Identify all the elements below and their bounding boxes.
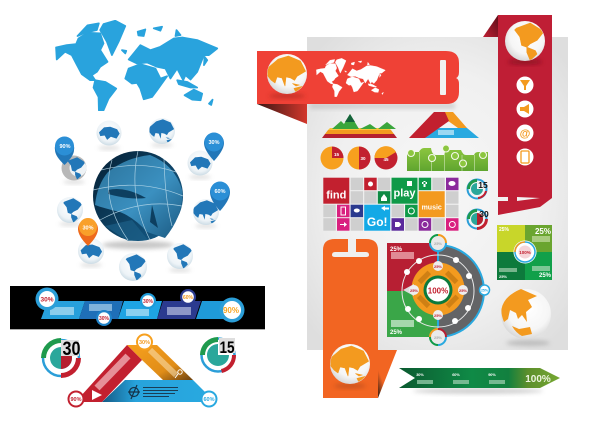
- small globe 6: [119, 253, 147, 281]
- red banner: [257, 51, 459, 124]
- badge 60%: 60%: [203, 397, 215, 403]
- inner labels: 25%: [434, 313, 442, 318]
- small globe 9: [62, 156, 86, 184]
- icon: megaphone: [516, 100, 534, 118]
- green arrow: 30%: [416, 373, 424, 377]
- world map: [56, 21, 217, 110]
- earth globe: [501, 289, 551, 346]
- green arrow: 60%: [452, 373, 460, 377]
- center 100%: 100%: [428, 286, 448, 296]
- pin 60%: 60%: [214, 189, 226, 195]
- red side: [80, 345, 142, 402]
- banner globe: [267, 54, 307, 98]
- panel: grey backdrop: [307, 37, 568, 350]
- pin 30%: [204, 132, 224, 161]
- segment 5: [196, 301, 235, 319]
- pin 90%: [55, 136, 74, 165]
- green arrow: [399, 368, 560, 394]
- pie charts: [320, 146, 398, 170]
- badge 30% lower: [96, 310, 112, 326]
- tile: play: play: [393, 188, 416, 200]
- small ring 15: 15: [478, 180, 488, 190]
- small globe 2: [149, 118, 175, 147]
- small globe 5: [167, 243, 193, 272]
- tile grid: [323, 178, 458, 231]
- badge 30%: [136, 334, 153, 350]
- crimson ribbon: [483, 15, 552, 215]
- letter shape: [440, 60, 446, 95]
- pin orange 30%: 30%: [82, 226, 94, 232]
- ring chart 30: 30: [62, 339, 80, 360]
- blue side: [102, 380, 215, 402]
- badge 30% middle: [140, 293, 156, 309]
- icon: cocktail: [516, 76, 534, 94]
- badge 90%: [220, 298, 244, 322]
- badge 60%: 60%: [183, 295, 194, 301]
- small ring 30: [467, 209, 489, 230]
- pie 30: 30: [360, 156, 366, 161]
- inner labels: 25%: [459, 288, 467, 293]
- triangle diagram: [68, 334, 218, 408]
- small globe 1: [96, 120, 122, 150]
- pin 60%: [210, 182, 230, 211]
- orbit dots: [404, 257, 472, 324]
- inner labels: 25%: [410, 288, 418, 293]
- green arrow: 90%: [488, 373, 496, 377]
- banner shadow: [310, 103, 455, 109]
- pie 15: 15: [334, 152, 339, 157]
- shadow: large globe: [102, 241, 174, 249]
- four-square chart: [497, 225, 552, 280]
- arrow shadow: [413, 388, 543, 394]
- green arrow: 100%: [525, 374, 551, 385]
- small ring 15: [467, 179, 488, 199]
- ring chart 15: [200, 337, 236, 373]
- ring chart 15: 15: [220, 338, 234, 357]
- bookmark fold: [378, 350, 397, 398]
- badge 60%: [180, 289, 196, 305]
- quadrant red: 25%: [390, 247, 403, 253]
- pie 45: 45: [383, 157, 389, 162]
- center ring: 100%: [519, 250, 531, 255]
- large globe: [93, 151, 183, 241]
- orbit ring: [402, 255, 474, 327]
- inner labels: 25%: [434, 264, 442, 269]
- small globe 4: [193, 199, 219, 228]
- icon: at sign: @: [520, 128, 531, 140]
- orange bookmark: [323, 239, 397, 398]
- badge 30%: 30%: [139, 340, 150, 346]
- badge 30% lower: 30%: [99, 316, 110, 322]
- badge 90%: [68, 390, 84, 408]
- pin 90%: 90%: [59, 144, 71, 150]
- ribbon globe: [505, 21, 545, 64]
- badge 30% middle: 30%: [143, 299, 154, 305]
- small ring 30: 30: [479, 209, 489, 219]
- pin 30%: 30%: [208, 140, 220, 146]
- badge top: 25%: [434, 241, 442, 246]
- icon: compass: [128, 385, 140, 399]
- four-square chart: 25%: [499, 274, 507, 279]
- orange side: [127, 345, 193, 380]
- mountain chart: [322, 114, 397, 138]
- half circle grey: [438, 245, 484, 337]
- bookmark slot: [332, 239, 369, 257]
- small globe 7: [78, 238, 104, 267]
- black timeline band: [10, 286, 265, 330]
- segment 4: [157, 301, 201, 319]
- badge right: 25%: [481, 288, 489, 292]
- white map: [316, 58, 385, 97]
- ribbon notch: [498, 197, 540, 201]
- ring chart 30: [41, 338, 81, 378]
- badge 60%: [200, 390, 218, 408]
- icon: key: [175, 370, 182, 378]
- four-square chart: 25%: [539, 273, 552, 279]
- tile: Go!: Go!: [367, 215, 388, 229]
- orange core: [412, 262, 464, 316]
- bookmark globe: [330, 344, 370, 388]
- small coloured tiles: [337, 178, 458, 231]
- banner fold: [257, 104, 307, 124]
- badge 90%: 90%: [70, 397, 82, 403]
- icon: at sign: [516, 124, 534, 142]
- circular diagram: [387, 235, 490, 345]
- pin orange 30%: [78, 218, 98, 246]
- small globe 8: [57, 197, 83, 226]
- ribbon fold: [483, 15, 498, 37]
- segment 1: [41, 301, 85, 319]
- four-square chart: 25%: [535, 227, 551, 236]
- mini triangle diagram: [409, 112, 479, 138]
- badge 30%: [36, 288, 58, 310]
- segment 3: [118, 301, 162, 319]
- badge bottom: 25%: [434, 335, 442, 340]
- small globe 3: [188, 150, 212, 179]
- quadrant green: 25%: [390, 330, 403, 336]
- green bar chart: [407, 145, 488, 171]
- badge 30%: 30%: [40, 296, 54, 304]
- tile: music: music: [422, 204, 442, 212]
- icon: phone: [516, 148, 534, 166]
- inner labels: [403, 261, 468, 320]
- globe ring: [55, 118, 230, 281]
- segment 2: [79, 301, 123, 319]
- tile: find: find: [326, 190, 346, 202]
- badge 90%: 90%: [223, 306, 239, 315]
- four-square chart: 25%: [499, 227, 510, 233]
